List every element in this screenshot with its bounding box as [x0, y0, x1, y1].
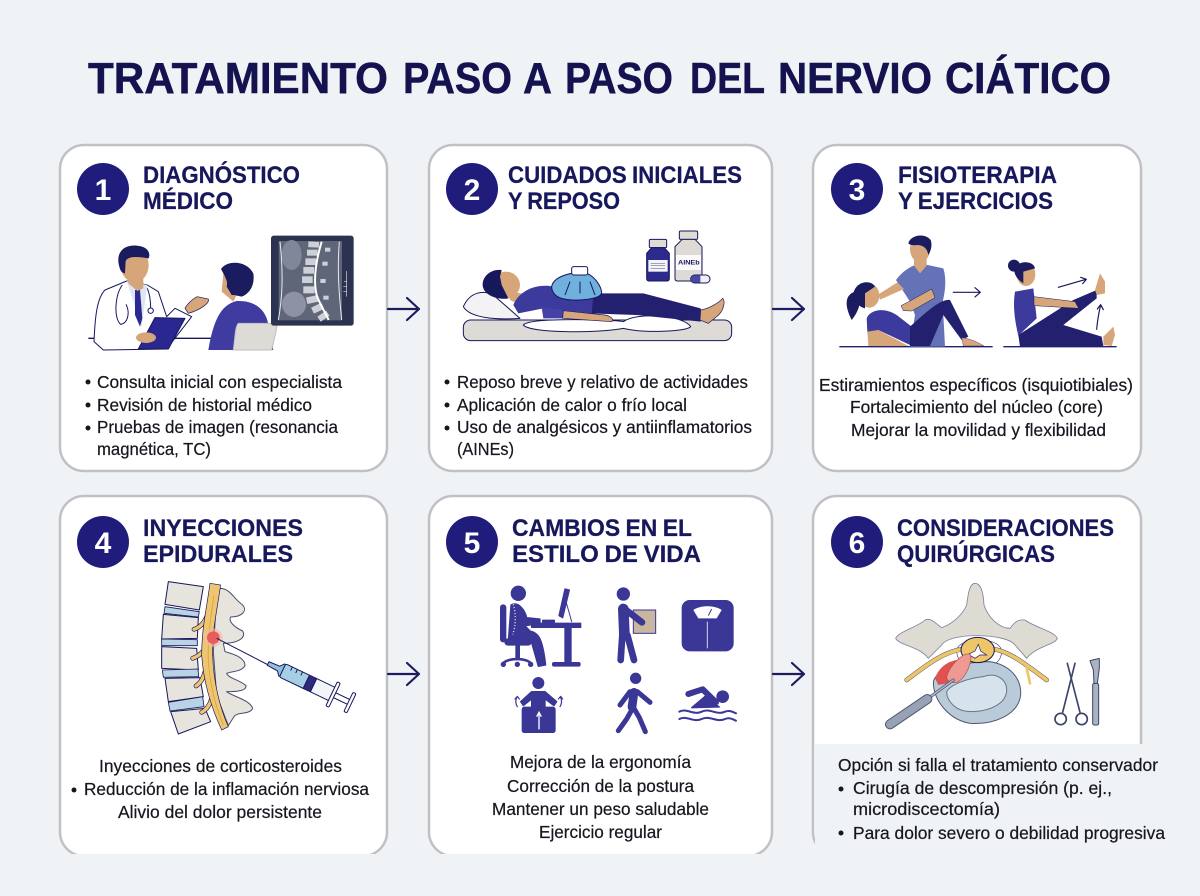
- step number 3: [831, 163, 883, 215]
- step number 4: 4: [95, 527, 112, 560]
- text: paso 3 list: [819, 375, 1133, 440]
- arrow: paso 2 a 3: [773, 298, 804, 320]
- panel: paso 5 estilo de vida: [429, 496, 772, 856]
- icon: walking: [618, 673, 650, 732]
- illustration: person resting with ice bag and medicine: [463, 231, 732, 341]
- title: A: [523, 54, 552, 103]
- text: paso 3 list: Fortalecimiento del núcleo (core): [850, 397, 1103, 417]
- arrow: paso 4 a 5: [388, 663, 419, 685]
- text: paso 6 list: [838, 755, 1165, 843]
- step number 6: 6: [849, 527, 865, 560]
- step number 3: 3: [849, 174, 865, 207]
- text: paso 1 bullets: Revisión de historial médico: [97, 395, 312, 415]
- title: TRATAMIENTO: [88, 54, 388, 103]
- icon: weighing scale: [682, 601, 733, 651]
- heading: cuidados iniciales y reposo: [508, 162, 742, 215]
- text: paso 4 list: Inyecciones de corticosteroides: [99, 756, 342, 776]
- illustration: person resting with ice bag and medicine: AINEb: [678, 259, 700, 266]
- text: paso 6 list: Cirugía de descompresión (p. ej.,: [853, 778, 1112, 798]
- heading: inyecciones epidurales: [143, 515, 303, 568]
- heading: inyecciones epidurales: EPIDURALES: [143, 541, 293, 568]
- heading: diagnóstico médico: DIAGNÓSTICO: [143, 161, 300, 189]
- panel: paso 6 consideraciones quirúrgicas: [813, 496, 1200, 864]
- icon: carrying box: [617, 588, 656, 660]
- text: paso 4 list: [72, 756, 369, 822]
- text: paso 2 bullets: Uso de analgésicos y antiinflamatorios: [457, 417, 752, 437]
- title: NERVIO: [778, 54, 932, 103]
- heading: fisioterapia y ejercicios: Y EJERCICIOS: [898, 188, 1053, 215]
- text: paso 5 list: Mejora de la ergonomía: [510, 752, 691, 772]
- arrow: paso 1 a 2: [388, 298, 419, 320]
- illustration: therapist and stretching patient: [839, 235, 1117, 347]
- text: paso 6 list: microdiscectomía): [853, 799, 1000, 819]
- text: paso 4 list: Alivio del dolor persistente: [118, 802, 322, 822]
- text: paso 2 bullets: [444, 372, 752, 459]
- icons: lifestyle changes: [501, 586, 736, 732]
- illustration: doctor, patient and spine scan: [88, 236, 354, 350]
- illustration: spine with epidural injection: [162, 582, 357, 734]
- arrow: paso 5 a 6: [773, 663, 804, 685]
- panel: paso 2 cuidados iniciales: [429, 145, 772, 471]
- panel: paso 4 inyecciones: [60, 496, 387, 856]
- panel: paso 3 fisioterapia: [813, 145, 1141, 471]
- step number 5: 5: [464, 527, 480, 560]
- title: [88, 53, 1111, 103]
- text: paso 5 list: Mantener un peso saludable: [492, 799, 709, 819]
- heading: cambios en el estilo de vida: CAMBIOS EN EL: [512, 515, 692, 542]
- illustration: vertebra, disc surgery and instruments: [890, 583, 1099, 725]
- step number 1: 1: [95, 174, 111, 207]
- heading: fisioterapia y ejercicios: [898, 162, 1057, 215]
- heading: consideraciones quirúrgicas: QUIRÚRGICAS: [897, 540, 1055, 568]
- text: paso 1 bullets: [86, 372, 342, 459]
- text: paso 5 list: Ejercicio regular: [539, 822, 662, 842]
- text: paso 6 list: Opción si falla el tratamiento conservador: [838, 755, 1158, 775]
- text: paso 3 list: Mejorar la movilidad y flexibilidad: [851, 420, 1106, 440]
- text: paso 6 list: Para dolor severo o debilidad progresiva: [853, 823, 1165, 843]
- title: PASO: [565, 54, 673, 103]
- title: PASO: [403, 54, 512, 103]
- text: paso 5 list: Corrección de la postura: [507, 776, 694, 796]
- title: DEL: [690, 54, 765, 103]
- icon: posture lifting: [515, 678, 563, 732]
- heading: cambios en el estilo de vida: [512, 515, 701, 568]
- text: paso 4 list: Reducción de la inflamación nerviosa: [84, 779, 369, 799]
- heading: diagnóstico médico: [143, 161, 300, 215]
- text: paso 2 bullets: Reposo breve y relativo de actividades: [457, 372, 748, 392]
- heading: diagnóstico médico: MÉDICO: [143, 187, 233, 215]
- title: CIÁTICO: [945, 53, 1111, 103]
- icon: swimming: [679, 689, 736, 721]
- text: paso 2 bullets: (AINEs): [457, 439, 514, 459]
- icon: ergonomic desk: [501, 586, 581, 666]
- step number 6: [831, 516, 883, 568]
- heading: cuidados iniciales y reposo: CUIDADOS INICIALES: [508, 162, 742, 189]
- text: paso 1 bullets: Consulta inicial con especialista: [97, 372, 342, 392]
- text: paso 2 bullets: Aplicación de calor o frío local: [457, 395, 687, 415]
- text: paso 1 bullets: Pruebas de imagen (resonancia: [97, 417, 338, 437]
- step number 4: [77, 516, 129, 568]
- heading: consideraciones quirúrgicas: CONSIDERACIONES: [897, 515, 1114, 542]
- heading: inyecciones epidurales: INYECCIONES: [143, 515, 303, 542]
- step number 2: [446, 163, 498, 215]
- text: paso 5 list: [492, 752, 709, 842]
- panel: paso 1 diagnóstico médico: [60, 145, 387, 471]
- text: paso 3 list: Estiramientos específicos (isquiotibiales): [819, 375, 1133, 395]
- step number 5: [446, 516, 498, 568]
- step number 2: 2: [464, 174, 480, 207]
- heading: consideraciones quirúrgicas: [897, 515, 1114, 568]
- heading: fisioterapia y ejercicios: FISIOTERAPIA: [898, 162, 1057, 189]
- text: paso 1 bullets: magnética, TC): [97, 439, 211, 459]
- heading: cambios en el estilo de vida: ESTILO DE VIDA: [512, 541, 701, 568]
- heading: cuidados iniciales y reposo: Y REPOSO: [508, 188, 620, 215]
- step number 1: [77, 163, 129, 215]
